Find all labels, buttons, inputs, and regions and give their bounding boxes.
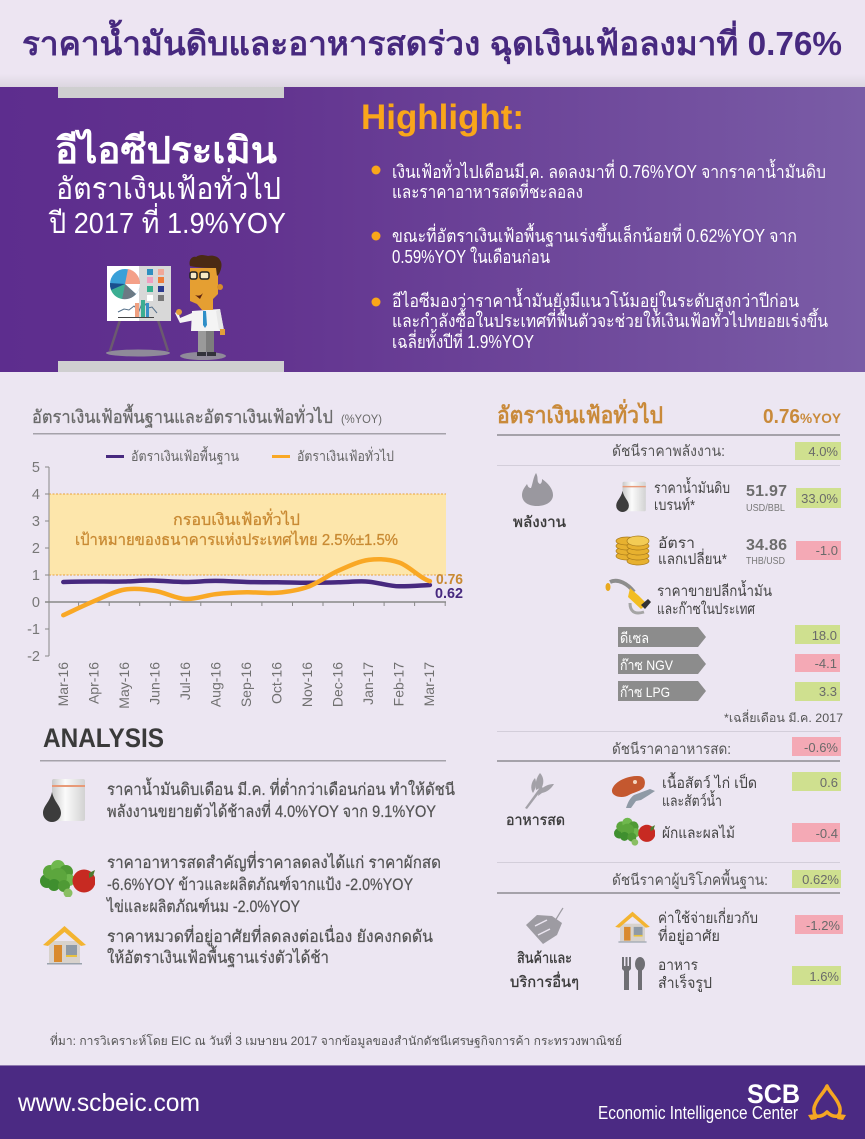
brent row (616, 477, 841, 514)
exchange rate row: -1.0 (816, 543, 838, 558)
axes: Feb-17 (390, 662, 406, 706)
retail fuel heading (606, 580, 772, 618)
LPG row (618, 681, 840, 701)
other goods category (510, 908, 579, 991)
axes: 1 (32, 568, 40, 584)
brent row: ราคาน้ำมันดิบ (654, 477, 730, 497)
NGV row (618, 654, 840, 674)
retail fuel heading: ราคาขายปลีกน้ำมัน (657, 580, 772, 600)
retail fuel heading: และก๊าซในประเทศ (657, 600, 755, 618)
title: ราคาน้ำมันดิบและอาหารสดร่วง ฉุดเงินเฟ้อลงมาที่ 0.76% (22, 19, 842, 65)
fresh food index row (497, 731, 841, 762)
axes: May-16 (116, 662, 132, 709)
source note: ที่มา: การวิเคราะห์โดย EIC ณ วันที่ 3 เมษายน 2017 จากข้อมูลของสำนักดัชนีเศรษฐกิจการค้า กระทรวงพาณิชย์ (50, 1032, 622, 1049)
highlight item 3 (372, 288, 828, 352)
analysis item: fresh food: ราคาอาหารสดสำคัญที่ราคาลดลงได้แก่ ราคาผักสด (107, 851, 441, 872)
energy index row (497, 442, 841, 466)
housing row: ค่าใช้จ่ายเกี่ยวกับ (658, 907, 758, 927)
forecast heading: อัตราเงินเฟ้อทั่วไป (56, 168, 281, 206)
website: www.scbeic.com (17, 1089, 200, 1117)
meat row: และสัตว์น้ำ (662, 790, 722, 810)
brent row: USD/BBL (746, 503, 785, 514)
brent row: เบรนท์* (654, 497, 695, 514)
analysis item: fresh food: ไข่และผลิตภัณฑ์นม -2.0%YOY (105, 897, 300, 916)
SCB wordmark (598, 1079, 800, 1123)
axes: Aug-16 (208, 662, 224, 707)
panel: analysis (40, 723, 455, 967)
axes: 2 (32, 541, 40, 557)
axes: Dec-16 (330, 662, 346, 707)
axes: 4 (32, 487, 40, 503)
highlight item 1 (372, 159, 826, 202)
fresh food index row: -0.6% (804, 740, 838, 755)
icon: coins (616, 536, 649, 565)
highlight heading: Highlight: (361, 98, 524, 137)
forecast heading: ปี 2017 ที่ 1.9%YOY (49, 203, 286, 240)
vegetables row: -0.4 (816, 826, 838, 841)
analysis item: fresh food (40, 851, 441, 916)
end values: 0.76 (436, 572, 463, 588)
chart legend (106, 446, 394, 465)
highlight item 1: และราคาอาหารสดที่ชะลอลง (392, 179, 583, 202)
analysis item: housing (43, 925, 433, 967)
footnote: *เฉลี่ยเดือน มี.ค. 2017 (724, 709, 843, 725)
fresh food category: อาหารสด (506, 812, 565, 829)
energy index row: 4.0% (808, 444, 838, 459)
exchange rate row (616, 535, 841, 568)
end values (435, 572, 463, 602)
axes: Sep-16 (238, 662, 254, 707)
diesel row (618, 625, 840, 647)
highlight item 2: ขณะที่อัตราเงินเฟ้อพื้นฐานเร่งขึ้นเล็กน้อยที่ 0.62%YOY จาก (392, 223, 797, 247)
target band: กรอบเงินเฟ้อทั่วไป (173, 508, 300, 529)
prepared food row: 1.6% (809, 969, 839, 984)
breakdown heading: อัตราเงินเฟ้อทั่วไป (497, 398, 663, 428)
target band: เป้าหมายของธนาคารแห่งประเทศไทย 2.5%±1.5% (75, 530, 398, 549)
chart heading: อัตราเงินเฟ้อพื้นฐานและอัตราเงินเฟ้อทั่วไป (32, 404, 333, 428)
analysis item: oil (43, 777, 455, 822)
core CPI row (497, 862, 841, 894)
exchange rate row: แลกเปลี่ยน* (658, 548, 727, 568)
highlight item 2 (372, 223, 797, 267)
fresh food category (506, 773, 565, 829)
chart heading: (%YOY) (341, 412, 382, 426)
core CPI row: 0.62% (802, 872, 839, 887)
energy category (513, 473, 566, 531)
axes: -2 (27, 649, 40, 665)
chart legend: อัตราเงินเฟ้อทั่วไป (297, 447, 394, 464)
axes: Apr-16 (86, 662, 102, 704)
housing row: -1.2% (806, 918, 840, 933)
prepared food row (622, 957, 841, 992)
breakdown heading: %YOY (800, 410, 842, 426)
meat row (612, 772, 841, 810)
icon: fork and spoon (622, 957, 645, 990)
icon: price tag (526, 908, 563, 944)
headline inflation line (63, 559, 430, 615)
axes: Mar-16 (55, 662, 71, 706)
forecast heading: อีไอซีประเมิน (55, 128, 277, 171)
other goods category: บริการอื่นๆ (510, 971, 579, 991)
vegetables row: ผักและผลไม้ (662, 824, 735, 842)
icon: SCB logo (808, 1086, 846, 1120)
chart legend: อัตราเงินเฟ้อพื้นฐาน (131, 446, 239, 465)
exchange rate row: อัตรา (658, 535, 695, 552)
analysis item: oil: ราคาน้ำมันดิบเดือน มี.ค. ที่ต่ำกว่าเดือนก่อน ทำให้ดัชนี (107, 777, 455, 799)
icon: wheat (525, 773, 554, 809)
NGV row: -4.1 (815, 656, 837, 671)
icon: fuel nozzle (606, 581, 651, 613)
panel: inflation breakdown (497, 398, 843, 992)
fresh food index row: ดัชนีราคาอาหารสด: (612, 741, 731, 758)
vegetables row (614, 818, 840, 846)
LPG row: 3.3 (819, 684, 837, 699)
breakdown heading (497, 398, 842, 436)
axes: 5 (32, 460, 40, 476)
SCB wordmark: SCB (747, 1079, 800, 1109)
core inflation line (63, 581, 430, 586)
axes: Jan-17 (360, 662, 376, 705)
axes: Oct-16 (268, 662, 284, 704)
brent row: 51.97 (746, 483, 787, 500)
core CPI row: ดัชนีราคาผู้บริโภคพื้นฐาน: (612, 869, 768, 889)
analysis item: oil: พลังงานขยายตัวได้ช้าลงที่ 4.0%YOY จาก 9.1%YOY (107, 800, 436, 821)
chart heading (32, 404, 446, 434)
NGV row: ก๊าซ NGV (620, 657, 674, 673)
end values: 0.62 (435, 586, 463, 602)
axes: Jun-16 (146, 662, 162, 705)
brent row: 33.0% (801, 491, 838, 506)
LPG row: ก๊าซ LPG (620, 684, 670, 700)
icon: meat and fish (612, 776, 655, 808)
axes: Jul-16 (177, 662, 193, 700)
diesel row: ดีเซล (620, 630, 649, 646)
axes: Nov-16 (299, 662, 315, 707)
analysis heading: ANALYSIS (43, 723, 164, 753)
axes: Mar-17 (421, 662, 437, 706)
prepared food row: อาหาร (658, 957, 698, 974)
analysis item: housing: ให้อัตราเงินเฟ้อพื้นฐานเร่งตัวได้ช้า (107, 945, 329, 967)
analysis item: housing: ราคาหมวดที่อยู่อาศัยที่ลดลงต่อเนื่อง ยังคงกดดัน (107, 925, 433, 947)
highlight item 3: เฉลี่ยทั้งปีที่ 1.9%YOY (392, 329, 534, 352)
axes: 3 (32, 514, 40, 530)
exchange rate row: THB/USD (746, 556, 785, 567)
SCB wordmark: Economic Intelligence Center (598, 1103, 798, 1123)
energy index row: ดัชนีราคาพลังงาน: (612, 443, 725, 460)
exchange rate row: 34.86 (746, 537, 787, 554)
icon: presenter with chart board (106, 255, 226, 360)
forecast heading (49, 128, 286, 240)
footer (0, 1065, 865, 1139)
meat row: 0.6 (820, 775, 838, 790)
energy category: พลังงาน (513, 514, 566, 531)
breakdown heading: 0.76 (763, 406, 800, 428)
panel: inflation chart (27, 404, 463, 709)
axes: 0 (32, 595, 40, 611)
axes (27, 460, 446, 709)
housing row (615, 907, 843, 945)
housing row: ที่อยู่อาศัย (658, 925, 720, 945)
prepared food row: สำเร็จรูป (658, 973, 712, 992)
analysis item: fresh food: -6.6%YOY ข้าวและผลิตภัณฑ์จากแป้ง -2.0%YOY (107, 875, 413, 894)
highlight item 2: 0.59%YOY ในเดือนก่อน (392, 246, 550, 267)
other goods category: สินค้าและ (517, 950, 572, 967)
highlight item 3: อีไอซีมองว่าราคาน้ำมันยังมีแนวโน้มอยู่ในระดับสูงกว่าปีก่อน (392, 288, 799, 312)
target band (49, 494, 446, 575)
axes: -1 (27, 622, 40, 638)
meat row: เนื้อสัตว์ ไก่ เป็ด (662, 772, 757, 792)
header band (0, 0, 865, 87)
panel: purple highlight band (0, 87, 865, 372)
diesel row: 18.0 (812, 628, 837, 643)
icon: flame (522, 473, 553, 506)
